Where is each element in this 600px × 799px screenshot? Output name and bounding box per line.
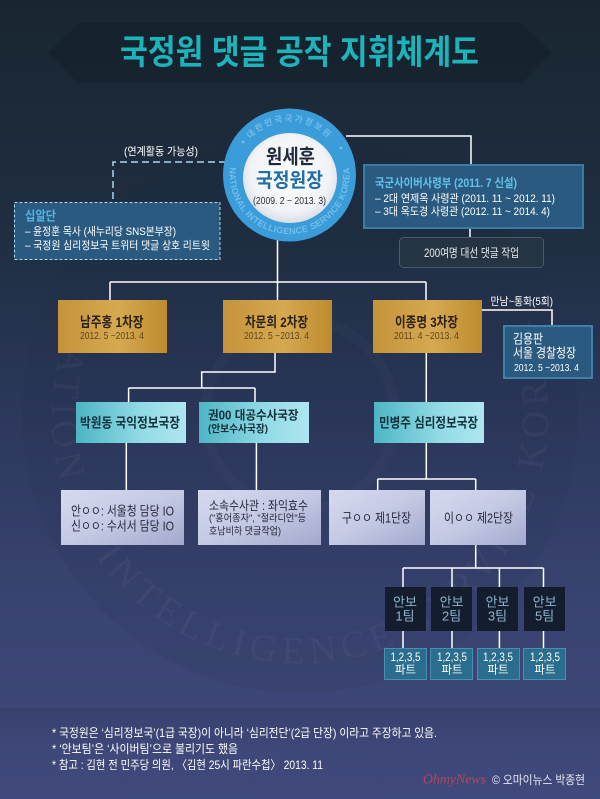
panel: police chief: 서울 경찰청장 [513,346,576,360]
watermark seal: NATIONAL INTELLIGENCE SERVICE KOREA [43,311,557,673]
director title: 국정원장 [256,169,323,192]
footnotes: * 참고 : 김현 전 민주당 의원, 〈김현 25시 파란수첩〉 2013. 11 [52,758,323,772]
team 1: 안보 [393,594,417,610]
title text: 국정원 댓글 공작 지휘체계도 [120,34,479,72]
title banner [48,23,552,83]
team 2: 1,2,3,5 [437,652,467,664]
panel: left group: – 국정원 심리정보국 트위터 댓글 상호 리트윗 [25,239,210,252]
box: vice director 1 [58,300,167,353]
link label: (연계활동 가능성) [124,144,198,158]
panel: cyber command: – 3대 옥도경 사령관 (2012. 11 ~ 2014. 4) [375,205,550,218]
box: team lead 1: 구ㅇㅇ 제1단장 [342,510,411,526]
box: vice director 3: 이종명 3차장 [395,314,458,330]
director name: 원세훈 [266,146,315,168]
watermark seal [22,137,578,693]
team 2: 안보 [440,594,464,610]
box: investigator [198,490,321,545]
ring text [229,114,350,234]
panel heading: 십알단 [25,208,56,224]
team 3 [477,587,520,680]
credit [423,772,585,788]
box: vice director 1: 2012. 5 ~2013. 4 [80,330,144,342]
panel: cyber command [364,165,583,228]
box: officers: 안ㅇㅇ: 서울청 담당 IO [71,504,174,518]
box: bureau chief park [76,402,186,443]
seal ring [223,108,356,242]
team 3: 안보 [486,594,509,610]
box: team lead 2 [430,490,526,545]
connector lines [110,136,552,648]
meeting label: 만남~통화(5회) [490,295,553,308]
team 2: 파트 [441,664,463,676]
box: vice director 3 [373,300,482,353]
box: team lead 2: 이ㅇㅇ 제2단장 [444,510,513,526]
credit: OhmyNews [423,772,487,788]
dashed link [113,162,226,202]
box: investigator: 호남비하 댓글작업) [209,524,281,538]
footnotes [52,726,437,772]
box: investigator: ("홍어종자", "절라디언"등 [209,512,306,524]
box: bureau chief kwon: (안보수사국장) [208,422,268,435]
team 3: 파트 [487,664,509,676]
team 2: 2팀 [442,608,461,624]
footnotes: * ‘안보팀’은 ‘사이버팀’으로 불리기도 했음 [52,742,238,756]
team 5 [524,587,566,680]
box: vice director 2 [223,300,332,353]
box: investigator: 소속수사관 : 좌익효수 [209,499,308,513]
team 1: 1,2,3,5 [390,652,420,664]
team 5: 5팀 [535,608,554,624]
team 2 [430,587,472,680]
title [48,23,552,83]
box: vice director 2: 차문희 2차장 [245,314,308,330]
footnotes: * 국정원은 ‘심리정보국’(1급 국장)이 아니라 ‘심리전단’(2급 단장) 이라고 주장하고 있음. [52,726,437,740]
box: election comments [400,238,544,268]
team 3: 1,2,3,5 [483,652,513,664]
panel: police chief [504,326,592,378]
team 5: 파트 [534,664,556,676]
box: officers: 신ㅇㅇ: 수서서 담당 IO [71,518,174,534]
box: bureau chief min: 민병주 심리정보국장 [379,416,478,430]
team 1 [384,587,426,680]
box: officers [61,490,184,545]
box: bureau chief park: 박원동 국익정보국장 [80,416,181,430]
box: vice director 3: 2011. 4 ~2013. 4 [394,330,459,342]
team 5: 1,2,3,5 [530,652,560,664]
panel lines: – 2대 연제옥 사령관 (2011. 11 ~ 2012. 11) [375,192,555,205]
box: bureau chief kwon [199,402,309,443]
box: election comments: 200여명 대선 댓글 작업 [424,246,519,260]
box: bureau chief min [374,402,484,443]
panel: police chief: 2012. 5 ~2013. 4 [514,362,579,374]
footer band [0,708,600,748]
team 1: 파트 [395,664,416,676]
box: vice director 1: 남주홍 1차장 [80,314,144,330]
panel heading: 국군사이버사령부 (2011. 7 신설) [375,176,517,190]
ring text: 대한민국국가정보원 [246,114,332,138]
panel: police chief: 김용판 [513,332,543,346]
panel lines: – 윤정훈 목사 (새누리당 SNS본부장) [25,225,176,238]
team 1: 1팀 [395,608,415,624]
panel: left group [14,202,220,260]
box: vice director 2: 2012. 5 ~2013. 4 [244,330,309,342]
credit: © 오마이뉴스 박종현 [492,773,585,787]
team 3: 3팀 [488,608,507,624]
director term: (2009. 2 ~ 2013. 3) [253,195,326,207]
team 5: 안보 [533,594,557,610]
seal centre [243,133,337,223]
box: team lead 1 [329,490,425,545]
box: bureau chief kwon: 권00 대공수사국장 [208,408,299,422]
seal: director [223,108,356,242]
ring text: NATIONAL INTELLIGENCE SERVICE KOREA [229,168,350,234]
